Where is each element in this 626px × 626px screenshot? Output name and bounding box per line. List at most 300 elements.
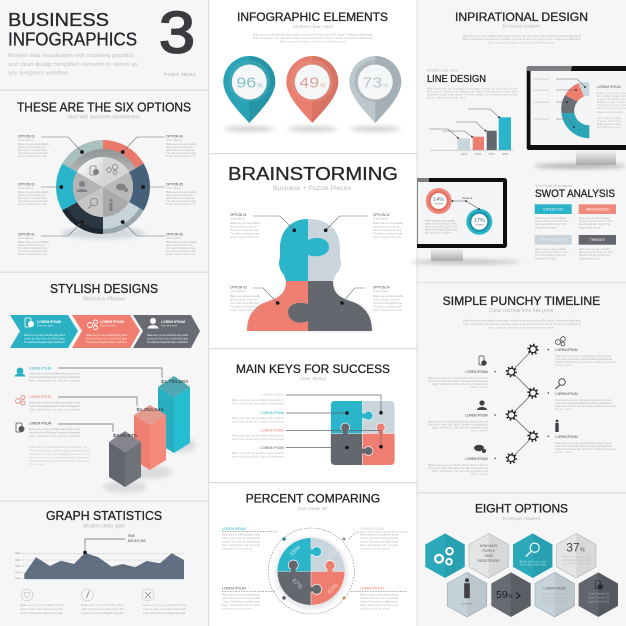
timeline item 3: Make sure you are probably doing what is best <box>555 441 612 445</box>
swot: opportunities: Nunc Amet Elit Ligula Thu <box>535 253 567 257</box>
panel: business infographics header <box>8 0 197 78</box>
heading: timeline: SIMPLE PUNCHY TIMELINE <box>443 294 600 308</box>
option 05 text: Dapo Vestibulum elit <box>166 202 195 206</box>
option 03 text: Dapo Vestibulum elit <box>18 154 47 158</box>
option 02 brain text: OPTION 02 <box>373 213 390 217</box>
key 3: LOREM IPSUM <box>260 428 284 432</box>
option 02 brain text: Lorem Ipsum <box>373 216 388 220</box>
monitor stand <box>534 150 626 168</box>
panel: inspirational design <box>427 10 626 168</box>
swot: opportunities <box>535 235 572 260</box>
row 2: salmon label <box>16 395 137 412</box>
row 2: salmon label: Make sure you are probably doing what is best <box>29 400 80 404</box>
swot: strengths <box>535 204 572 230</box>
option 02 text: Make sure you are probably <box>18 190 50 194</box>
row 2: salmon label: Vero Nunc Amet Elit Ligula Thunderous Magnitude <box>29 404 81 408</box>
line design paragraph <box>427 86 519 100</box>
timeline item 1: Vero Nunc Amet Elit Ligula Thunderous Magnitude <box>555 357 613 361</box>
option 02 text: Lorem Ipsum <box>18 186 33 190</box>
salmon chevron: LOREM IPSUM <box>100 320 124 324</box>
hexagon 8: touch <box>579 572 618 617</box>
key 1: Vero Nunc Amet Elit Ligula Thunderous <box>232 402 285 406</box>
swot stand <box>410 248 520 264</box>
percent label top right: what is best Vero Nunc Amet Elit <box>360 536 398 540</box>
swot: strengths: Make sure you are probably <box>535 216 567 220</box>
pin shadows <box>224 126 400 132</box>
percent label top left: Make sure you are probably doing <box>222 532 261 536</box>
percent label bottom left: Make sure you are probably doing <box>222 592 261 596</box>
timeline gears and connector <box>494 344 549 463</box>
swot: threats: Magnitude Dapo <box>579 256 601 260</box>
timeline item 2: LOREM IPSUM <box>555 392 578 396</box>
hexagon 3: search: Vero Nunc Amet Elit <box>520 563 546 567</box>
swot: weaknesses: Nunc Amet Elit Ligula Thu <box>579 222 611 226</box>
option 05 text: Lorem Ipsum <box>166 186 181 190</box>
option 02 text <box>18 182 50 206</box>
hexagon 4: 37 percent: Ligula Thunderous <box>562 562 591 566</box>
stat: tools: what is best Vero Nunc Amet Elit <box>143 607 186 611</box>
pin: 73 percent: % <box>383 84 389 90</box>
option 06 text: doing what is best for <box>166 243 193 247</box>
option 03 brain text: Vero Nunc Amet Elit Ligu <box>230 301 260 305</box>
key 2: LOREM IPSUM <box>260 411 284 415</box>
hexagon 3: search <box>513 533 552 578</box>
intro paragraph: Dapo Vestibulum elit sed ante sodales porta amet dolor sit lorem ipsum consectetur adipiscing <box>253 36 373 40</box>
intro paragraph: Make sure you are probably doing what is best for Vero Nunc Amet Elit Ligula Thunderous Magnitude <box>253 32 373 36</box>
hexagon 6: 59 percent: 59 <box>496 589 508 601</box>
subheading: brainstorming: Business + Puzzle Pieces <box>273 185 352 192</box>
monitor text: Vero Nunc Amet <box>597 116 621 120</box>
stat: bulb: what is best Vero Nunc Amet Elit <box>81 607 124 611</box>
bottom right piece <box>288 281 372 331</box>
option 06 text: Dapo Vestibulum elit <box>166 252 195 256</box>
puzzle percent labels: 55% <box>289 544 303 558</box>
puzzle percent labels: 67% <box>290 578 304 591</box>
wheel callout lines <box>41 137 165 236</box>
option 05 text <box>166 182 198 206</box>
hexagon 2: question: REGISTERED? <box>477 559 500 563</box>
swot monitor text: Magnitude Dapo Vestibulum <box>425 228 458 232</box>
small overline: Modern and clean <box>427 68 459 72</box>
heading: eight options: EIGHT OPTIONS <box>475 502 568 516</box>
panel: six options <box>17 100 198 256</box>
timeline item 5: Vero Nunc Amet Elit Ligula Thunderous Magnitude <box>428 422 489 426</box>
paragraph under rows: Nunc amet <box>29 462 44 466</box>
option 05 text: Thunderous Magnitude <box>166 199 197 203</box>
subheading: main keys: Clear design <box>300 376 327 382</box>
hexagon 4: 37 percent <box>557 533 596 578</box>
option 03 text: Lorem Ipsum <box>18 138 33 142</box>
panel: percent comparing <box>222 492 407 614</box>
paragraph under rows <box>29 445 91 466</box>
percent label top right: sodales porta amet <box>360 546 390 550</box>
option 04 brain text: Dapo Vestibulum elit <box>373 308 402 312</box>
option 01 brain text: OPTION 01 <box>230 213 247 217</box>
option 05 text: Vero Nunc Amet Elit Ligu <box>166 196 196 200</box>
top left piece <box>279 219 329 281</box>
stat: tools <box>142 589 187 615</box>
area chart: 500 <box>15 551 20 555</box>
subheading: inpirational design: To impact readers <box>502 24 541 30</box>
timeline item 5 <box>428 400 489 432</box>
option 04 text: OPTION 04 <box>166 134 183 138</box>
monitor frame <box>527 66 626 150</box>
small bar chart: 17% <box>488 152 495 156</box>
monitor text: Ligula Thunder <box>597 119 621 123</box>
key 1: LOREM IPSUM <box>260 393 284 397</box>
row 1: teal label: LOREM IPSUM <box>29 366 52 370</box>
option 03 text: doing what is best for <box>18 145 45 149</box>
subheading: six options: Start with awesome creativeness <box>67 114 141 120</box>
option 04 brain text: Thunderous Magnitude <box>373 304 403 308</box>
option 06 text: Make sure you are probably <box>166 240 198 244</box>
head callouts <box>253 216 368 305</box>
pin: 49 percent <box>286 56 338 123</box>
donut labels: Lorem Ipsum <box>534 77 549 81</box>
hexagon 2: question: HAVE <box>484 554 493 558</box>
percent label top right: Dapo Vestibulum elit sed ante <box>360 543 399 547</box>
panel: stylish designs <box>10 281 200 493</box>
option 03 text <box>18 134 50 158</box>
row 1: teal label <box>14 366 162 382</box>
option 06 text: Lorem Ipsum <box>166 236 181 240</box>
intro text: any designers workflow <box>8 70 68 76</box>
option 01 text: Lorem Ipsum <box>18 236 33 240</box>
timeline item 1: Make sure you are probably doing what is best <box>555 354 612 358</box>
option 04 text: doing what is best for <box>166 145 193 149</box>
hexagon 4: 37 percent: Make sure you are <box>562 555 591 559</box>
option 01 brain text: Dapo Vestibulum elit <box>230 235 259 239</box>
intro paragraph: Dapo Vestibulum elit sed ante sodales porta amet dolor sit lorem ipsum consectetur adipiscing <box>463 322 582 326</box>
option 02 text: OPTION 02 <box>18 182 35 186</box>
puzzle head <box>247 219 372 331</box>
timeline item 4 <box>428 356 489 389</box>
hexagon 4: 37 percent: Vero Nunc Amet Elit <box>562 558 591 562</box>
gray bar <box>109 431 141 487</box>
percent label bottom right: sodales porta amet <box>360 606 390 610</box>
heading: main keys: MAIN KEYS FOR SUCCESS <box>236 362 390 376</box>
area chart: 100 <box>15 576 20 580</box>
option 05 text: Make sure you are probably <box>166 190 198 194</box>
pin: 49 percent: % <box>320 84 326 90</box>
percent label bottom right: Dapo Vestibulum elit sed ante <box>360 603 399 607</box>
option 03 text: OPTION 03 <box>18 134 35 138</box>
swot monitor text: doing what is best for Vero <box>425 222 458 226</box>
option 02 brain text: Vero Nunc Amet Elit Ligu <box>373 228 403 232</box>
donut chart <box>561 82 589 138</box>
area chart: 200 <box>15 570 20 574</box>
option 06 text: Thunderous Magnitude <box>166 249 197 253</box>
swot: opportunities: Make sure you are probably <box>535 247 567 251</box>
paragraph under rows: Vero Nunc Amet Elit Ligula Thunderous Magnitude Dapo <box>29 448 91 452</box>
salmon chevron: Your text here <box>100 324 117 328</box>
timeline item 1 <box>555 337 617 367</box>
subheading: graph statistics: Modern clean style <box>83 524 125 530</box>
option 03 brain text: Thunderous Magnitude <box>230 304 260 308</box>
small bar chart: 14% <box>461 152 467 156</box>
timeline item 6: LOREM IPSUM <box>465 457 488 461</box>
stat: bulb: Make sure you are probably doing <box>81 603 125 607</box>
option 02 text: Vero Nunc Amet Elit Ligu <box>18 196 48 200</box>
option 01 text <box>18 232 50 256</box>
intro paragraph: Make sure you are probably doing what is best for Vero Nunc Amet Elit Ligula Thunderous Magnitude <box>463 34 582 38</box>
gray chevron <box>133 315 200 348</box>
key 3: Make sure you are probably doing what is <box>232 434 285 438</box>
intro text: and clean design Simplified elements to speed up <box>8 62 137 68</box>
teal bar <box>158 376 190 453</box>
swot monitor text: elit sed ante sodales <box>425 230 452 234</box>
hexagon 6: 59 percent: % <box>508 594 513 600</box>
monitor text: Magnitude Dapo <box>597 100 626 104</box>
monitor with donut <box>527 66 626 168</box>
hexagon 7: lorem ipsum: LOREM IPSUM <box>544 587 566 591</box>
row 3: gray label: Vero Nunc Amet Elit Ligula Thunderous Magnitude <box>29 430 81 434</box>
swot monitor text: Nunc Amet Elit Ligula Thu <box>425 224 458 228</box>
monitor text: LOREM IPSUM <box>597 85 621 89</box>
monitor text: Vero Nunc Amet Elit <box>597 94 626 98</box>
option 06 text <box>166 232 198 256</box>
intro text <box>8 53 137 76</box>
stat: heart <box>20 589 64 615</box>
option 04 text: Lorem Ipsum <box>166 138 181 142</box>
swot: threats: Nunc Amet Elit Ligula Thu <box>579 253 611 257</box>
pin: 96 percent <box>223 56 275 123</box>
option 04 text: Dapo Vestibulum elit <box>166 154 195 158</box>
option 03 text: Thunderous Magnitude <box>18 151 49 155</box>
wheel icons <box>76 164 128 211</box>
hexagon 8: touch: Option Number 01 <box>588 592 609 596</box>
hexagon 4: 37 percent: 37 <box>566 541 580 555</box>
option 01 brain text: Lorem Ipsum <box>230 216 245 220</box>
option 03 text: Make sure you are probably <box>18 142 50 146</box>
donut labels: Lorem Ipsum <box>534 117 549 121</box>
panel: swot analysis <box>410 178 616 264</box>
swot monitor text: Make sure you are probably <box>425 218 456 222</box>
stat: heart: what is best Vero Nunc Amet Elit <box>20 607 63 611</box>
stat: tools: Ligula Thunderous Magnitude Dapo <box>143 611 187 615</box>
paragraph under rows: Vestibulum elit sed ante sodales porta amet dolor sit <box>29 452 90 456</box>
salmon chevron: Make sure you are probably doing what <box>86 333 127 337</box>
swot: weaknesses: doing what is best for Vero <box>579 219 614 223</box>
percent label bottom left: Dapo Vestibulum elit sed ante <box>222 603 261 607</box>
line design block <box>427 68 519 156</box>
font note: FONT: NEXA <box>164 72 197 78</box>
timeline item 6: Make sure you are probably doing what is best for <box>428 463 488 467</box>
hexagon 2: question: PEOPLE <box>482 549 495 553</box>
row 3: gray label <box>16 422 113 438</box>
option 02 brain text <box>373 213 404 239</box>
percent label top right <box>349 527 407 550</box>
timeline item 1: Dapo Vestibulum elit sed ante sodales porta amet <box>555 360 617 364</box>
area chart <box>15 551 184 580</box>
option 04 brain text: Lorem Ipsum <box>373 289 388 293</box>
hexagon 5: person: Business <box>461 602 473 606</box>
percent label top left: LOREM IPSUM <box>222 527 246 531</box>
puzzle circle <box>275 537 347 609</box>
option 02 brain text: Make sure you are probably <box>373 221 404 225</box>
monitor text: Make sure you are <box>597 110 624 114</box>
salmon chevron: is best for Vero Nunc Amet Elit Ligula <box>86 336 128 340</box>
timeline item 3: Nunc amet <box>555 450 573 454</box>
percent label top left <box>222 527 278 550</box>
line design paragraph: Elit Ligula Thunderous Magnitude Dapo Vestibulum elit sed ante <box>427 90 519 94</box>
option 03 text: Vero Nunc Amet Elit Ligu <box>18 148 48 152</box>
subheading: eight options: To impact readers <box>502 516 541 522</box>
percent label bottom left: sodales porta amet <box>222 606 252 610</box>
option 01 brain text: doing what is best for <box>230 224 257 228</box>
subheading: timeline: Close out how time has gone <box>489 308 553 314</box>
paragraph under rows: Thunderous Magnitude Dapo Vestibulum elit sed ante <box>29 459 90 463</box>
timeline item 1: LOREM IPSUM <box>555 348 578 352</box>
option 02 text: Dapo Vestibulum elit <box>18 202 47 206</box>
swot: opportunities: OPPORTUNITIES <box>540 238 567 242</box>
timeline item 2 <box>555 379 617 411</box>
intro paragraph <box>253 32 373 44</box>
key 4: Make sure you are probably doing what is <box>232 451 285 455</box>
swot: weaknesses: Magnitude Dapo <box>579 226 601 230</box>
ring connector: Medical <box>462 196 472 200</box>
salmon ring stat <box>426 188 452 214</box>
percent label top left: Dapo Vestibulum elit sed ante <box>222 543 261 547</box>
percent label top right: Make sure you are probably doing <box>360 532 399 536</box>
subheading: infographic elements: Modern clean style <box>293 24 333 30</box>
gray chevron: Make sure you are probably doing what <box>147 333 188 337</box>
percent label top right: Ligula Thunderous Magnitude <box>360 540 399 544</box>
row 1: teal label: Vero Nunc Amet Elit Ligula Thunderous Magnitude <box>29 375 81 379</box>
timeline item 3 <box>555 420 617 454</box>
line design paragraph: Make sure you are probably doing what is best for Vero Nunc Amet <box>427 86 517 90</box>
row 2: salmon label: Dapo Vestibulum elit sed ante sodales <box>29 408 81 412</box>
percent label bottom right: Make sure you are probably doing <box>360 592 399 596</box>
bar values <box>113 379 189 438</box>
pie wheel <box>56 140 150 239</box>
teal chevron: is best for Vero Nunc Amet Elit Ligula <box>24 336 66 340</box>
salmon chevron <box>72 315 140 348</box>
monitor text: Magnitude Dapo <box>597 122 622 126</box>
swot: strengths: doing what is best for Vero <box>535 219 570 223</box>
area chart: 400 <box>15 558 20 562</box>
key 2: Make sure you are probably doing what is <box>232 416 285 420</box>
stat: heart: Ligula Thunderous Magnitude Dapo <box>20 611 64 615</box>
intro text: Modern data visualization with rocketing graphics <box>8 53 134 59</box>
donut labels: Lorem Ipsum <box>534 88 549 92</box>
hexagon 8: touch: Option Number 02 <box>588 596 609 600</box>
swot: opportunities: Magnitude Dapo <box>535 256 557 260</box>
timeline item 2: Vero Nunc Amet Elit Ligula Thunderous Magnitude <box>555 401 613 405</box>
percent label bottom left: Ligula Thunderous Magnitude <box>222 600 261 604</box>
timeline item 2: Make sure you are probably doing what is best <box>555 398 612 402</box>
stat: bulb: Ligula Thunderous Magnitude Dapo <box>81 611 125 615</box>
swot: threats: doing what is best for Vero <box>579 250 614 254</box>
hexagon 6: 59 percent <box>491 572 531 617</box>
option 04 text: Vero Nunc Amet Elit Ligu <box>166 148 196 152</box>
option 06 text: OPTION 06 <box>166 232 183 236</box>
bar values: $1,793,893 <box>161 379 189 384</box>
percent label top left: sodales porta amet <box>222 546 252 550</box>
teal chevron: Make sure you are probably doing what <box>24 333 65 337</box>
hexagon 2: question: HOW MANY <box>480 544 499 548</box>
swot overline: The Point of Analysis <box>535 183 572 188</box>
donut labels <box>534 77 586 128</box>
timeline item 4: Nunc amet <box>471 385 488 389</box>
hexagon 1: gears <box>425 533 465 578</box>
hexagon 5: person <box>447 572 487 617</box>
option 01 text: Vero Nunc Amet Elit Ligu <box>18 246 48 250</box>
percent label bottom left <box>222 586 276 610</box>
gray chevron: LOREM IPSUM <box>161 320 185 324</box>
option 03 brain text: Lorem Ipsum <box>230 289 245 293</box>
option 04 brain text <box>373 286 404 312</box>
timeline item 3: Dapo Vestibulum elit sed ante sodales porta amet <box>555 447 617 451</box>
percent label bottom right: LOREM IPSUM <box>360 586 384 590</box>
marker dots <box>282 537 346 600</box>
salmon chevron: Thunderous Magnitude Dapo Vestibulum <box>86 340 127 344</box>
timeline item 1: Nunc amet <box>555 363 573 367</box>
monitor text: Ligula Thunderous <box>597 97 626 101</box>
option 04 brain text: Make sure you are probably <box>373 294 404 298</box>
option 04 brain text: doing what is best for <box>373 298 400 302</box>
pin: 96 percent: % <box>257 84 263 90</box>
percent label bottom left: what is best Vero Nunc Amet Elit <box>222 596 260 600</box>
hexagon 3: search: Make sure you are <box>520 560 546 564</box>
small bar chart: 47% <box>502 152 508 156</box>
option 01 text: doing what is best for <box>18 243 45 247</box>
timeline item 4: Dapo Vestibulum elit sed ante sodales porta <box>432 382 489 386</box>
option 06 text: Vero Nunc Amet Elit Ligu <box>166 246 196 250</box>
option 01 text: OPTION 01 <box>18 232 35 236</box>
panel: brainstorming <box>228 164 404 331</box>
percent label top left: what is best Vero Nunc Amet Elit <box>222 536 260 540</box>
row 1: teal label: Make sure you are probably doing what is best <box>29 372 80 376</box>
swot monitor text <box>425 218 458 234</box>
monitor text: ante sodales porta <box>597 106 626 110</box>
key 3: Vero Nunc Amet Elit Ligula Thunderous <box>232 437 285 441</box>
pin: 49 percent: 49 <box>299 74 319 92</box>
bottom left piece <box>247 281 308 331</box>
heading: inpirational design: INPIRATIONAL DESIGN <box>455 10 588 24</box>
timeline item 5: Nunc amet <box>471 428 488 432</box>
timeline item 4: LOREM IPSUM <box>465 370 488 374</box>
swot: strengths: Magnitude Dapo <box>535 226 557 230</box>
monitor text <box>597 85 626 129</box>
timeline item 4: Make sure you are probably doing what is best for <box>428 376 488 380</box>
option 01 brain text: Thunderous Magnitude <box>230 232 260 236</box>
option 01 brain text: Make sure you are probably <box>230 221 261 225</box>
option 04 text: Thunderous Magnitude <box>166 151 197 155</box>
chart callout <box>83 534 146 554</box>
paragraph under rows: Make sure you are probably doing what is best for you <box>29 445 88 449</box>
option 05 text: doing what is best for <box>166 193 193 197</box>
line design paragraph: Nunc magna feugiat sed <box>427 96 466 100</box>
key 1 <box>232 393 383 415</box>
percent label bottom right: what is best Vero Nunc Amet Elit <box>360 596 398 600</box>
teal chevron: LOREM IPSUM <box>37 320 61 324</box>
hexagon 8: touch: Option Number 03 <box>588 600 609 604</box>
subheading: stylish designs: Minimal is effective <box>83 296 125 302</box>
bar values: $848,875 <box>113 433 138 438</box>
option 03 brain text: Dapo Vestibulum elit <box>230 308 259 312</box>
paragraph under rows: Lorem ipsum dolor sit amet consectetur adipiscing <box>29 456 90 460</box>
option 02 text: Thunderous Magnitude <box>18 199 49 203</box>
chart callout: $20,847,560 <box>128 539 146 543</box>
chart callout: SME <box>128 534 135 538</box>
heading: business infographics: BUSINESS <box>8 10 109 30</box>
heading: business infographics: INFOGRAPHICS <box>8 30 137 50</box>
swot: strengths: STRENGTHS <box>543 208 564 212</box>
option 03 brain text <box>230 286 261 312</box>
option 04 text <box>166 134 198 158</box>
key 2 <box>232 411 349 424</box>
